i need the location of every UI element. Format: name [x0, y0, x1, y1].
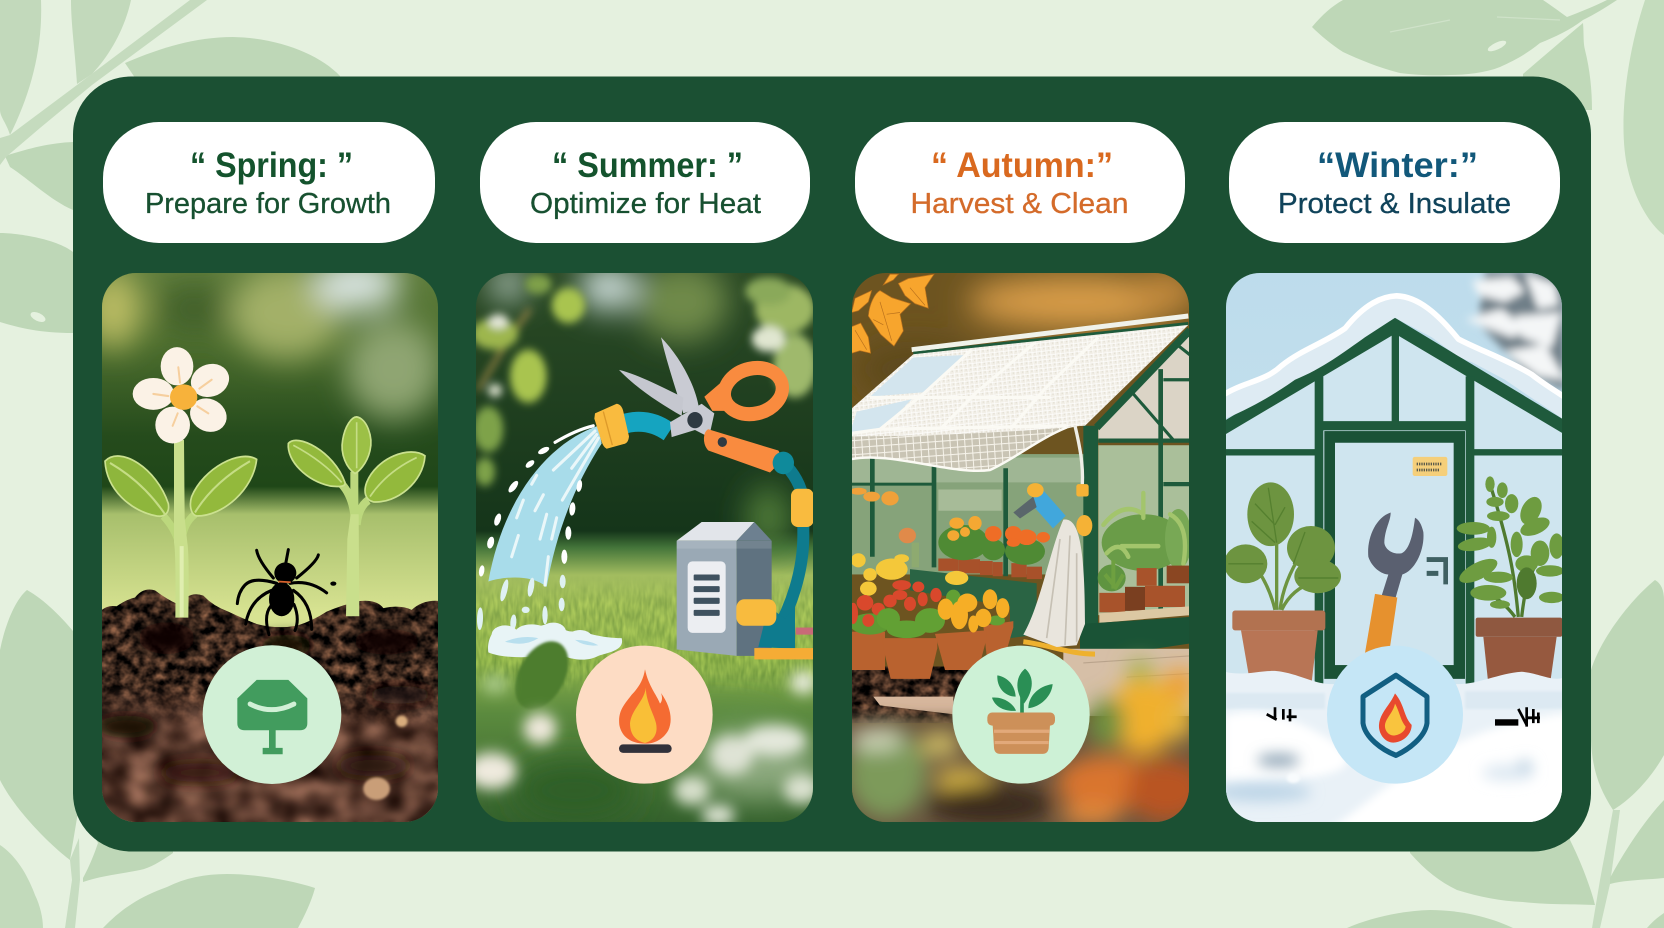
left potted plant — [1224, 482, 1341, 682]
title: Autumn: “ Autumn:” — [931, 146, 1113, 185]
subtitle: Protect & Insulate: Protect & Insulate — [1278, 188, 1511, 220]
pill: Winter heading — [1229, 122, 1560, 243]
right interior plants — [1098, 493, 1192, 623]
flower — [133, 347, 233, 443]
shade netting over roof — [850, 316, 1188, 471]
paving and soil — [852, 648, 1189, 822]
soil mound — [100, 589, 440, 825]
subtitle: Optimize for Heat: Optimize for Heat — [530, 188, 761, 220]
greenhouse base wall — [910, 569, 1037, 638]
pruning shears — [619, 337, 786, 472]
autumn scene card — [852, 273, 1189, 822]
water puddle foam — [488, 623, 622, 660]
seedling right — [288, 417, 425, 616]
greenhouse interior — [850, 454, 1090, 574]
autumn icon: potted plant badge — [952, 646, 1090, 784]
summer scene card — [467, 263, 822, 826]
winter scene card — [1212, 270, 1572, 836]
timer control box — [677, 522, 772, 656]
door label — [1413, 457, 1447, 476]
seedling with flower — [105, 347, 257, 618]
main green panel — [73, 76, 1591, 852]
watering hose and nozzle — [594, 404, 669, 449]
title: Winter: “Winter:” — [1317, 146, 1478, 185]
greenhouse frame — [850, 330, 1190, 656]
water stream — [477, 426, 602, 630]
right potted plant — [1456, 476, 1564, 684]
snow ground — [1226, 670, 1562, 822]
blurred foreground plants — [467, 631, 822, 826]
back row of potted flowers — [850, 488, 1050, 579]
wrench tool — [1365, 512, 1424, 653]
snowy tree — [1465, 270, 1565, 390]
hose coil and coupling — [773, 452, 814, 635]
spring icon: hedge tool badge — [203, 645, 341, 784]
snow debris marks — [1267, 707, 1540, 727]
door handle — [1427, 560, 1446, 584]
spring scene card — [83, 259, 440, 825]
title: Summer: “ Summer: ” — [552, 146, 743, 185]
pill: Summer heading — [480, 122, 810, 243]
pill: Autumn heading — [855, 122, 1185, 243]
subtitle: Prepare for Growth: Prepare for Growth — [145, 188, 391, 220]
blurred autumn foreground — [847, 660, 1207, 826]
winter icon: insulated shield badge — [1327, 646, 1463, 784]
autumn leaves branch — [852, 274, 934, 353]
hanging cloth and tool — [1013, 426, 1095, 654]
beetle pest — [237, 550, 336, 635]
summer icon: flame badge — [576, 646, 713, 784]
subtitle: Harvest & Clean: Harvest & Clean — [910, 188, 1128, 220]
pill: Spring heading — [103, 122, 435, 243]
front potted flowers — [849, 553, 1013, 679]
title: Spring: “ Spring: ” — [190, 146, 353, 185]
greenhouse glass and frame — [1225, 318, 1565, 695]
snow on roof — [1225, 294, 1565, 420]
hose reel base — [736, 599, 816, 659]
grass texture — [476, 584, 813, 688]
